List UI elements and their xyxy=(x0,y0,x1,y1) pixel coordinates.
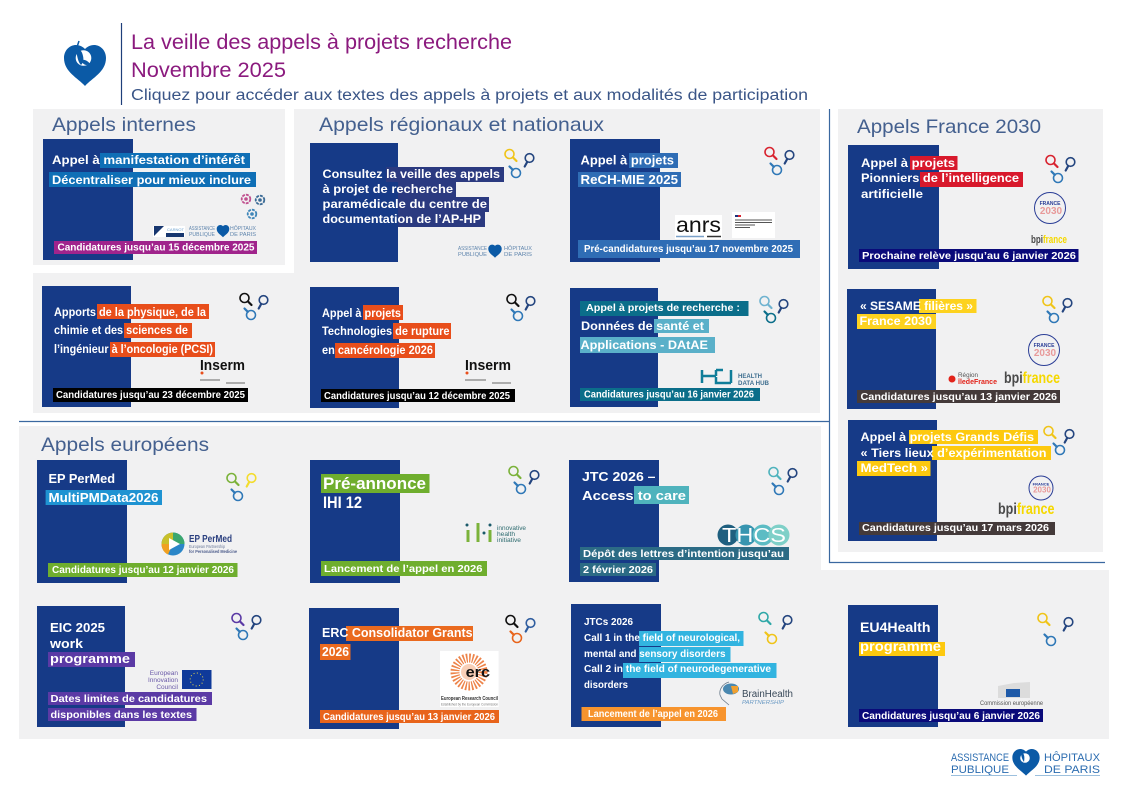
card: Pionniers de l'intelligence artificielle: Appel à projets xyxy=(861,156,955,170)
deadline: Candidatures jusqu’au 6 janvier 2026 xyxy=(862,710,1040,722)
icon: three virus shapes xyxy=(242,195,264,218)
card: DAtAE: Données de santé et xyxy=(581,319,704,333)
logo: erc xyxy=(440,651,499,707)
deadline: Candidatures jusqu’au 23 décembre 2025 xyxy=(56,390,245,401)
logo: Région Île-de-France xyxy=(948,373,997,386)
card: Technologies de rupture: Appel à projets xyxy=(322,308,401,320)
card: Décentraliser pour mieux inclure: Décentraliser pour mieux inclure xyxy=(52,175,251,187)
card: EU4Health programme xyxy=(848,605,1073,727)
logo: Région Île-de-France: Région xyxy=(958,373,978,379)
card: Décentraliser pour mieux inclure xyxy=(43,139,264,260)
heading: Appels France 2030: Appels France 2030 xyxy=(857,116,1041,138)
card: Pionniers de l'intelligence artificielle xyxy=(848,145,1078,269)
card: DAtAE xyxy=(570,288,788,407)
icon: magnifying glasses xyxy=(509,466,539,494)
logo: BrainHealth Partnership: PARTNERSHIP xyxy=(742,700,784,706)
logo: European Innovation Council: European xyxy=(150,670,178,677)
logo: ministère xyxy=(732,212,775,238)
header logo: AP-HP heart xyxy=(64,41,106,86)
deadline: Lancement de l’appel en 2026 xyxy=(588,709,718,720)
panel: Appels France 2030 xyxy=(838,109,1103,552)
card: EP PerMed: EP PerMed xyxy=(48,472,115,486)
card: Décentraliser pour mieux inclure: Appel à manifestation d’intérêt xyxy=(52,155,245,167)
card: Tiers lieux MedTech xyxy=(848,420,1074,541)
logo: France 2030: 2030 xyxy=(1040,206,1063,217)
card: IHI 12: IHI 12 xyxy=(323,494,362,512)
heading: Appels européens: Appels européens xyxy=(41,434,209,456)
card: Technologies de rupture: Technologies de rupture xyxy=(322,326,450,338)
card: JTCs 2026 Brain Health: Call 1 in the field of neurological, xyxy=(584,632,740,644)
logo: Commission européenne: Commission européenne xyxy=(980,700,1043,707)
logo: AP-HP: PUBLIQUE xyxy=(189,232,216,238)
card: Tiers lieux MedTech: « Tiers lieux d’expérimentation xyxy=(860,446,1046,460)
logo: Health Data Hub xyxy=(702,370,769,387)
card: veille recherche paramédicale: paramédicale du centre de xyxy=(322,199,487,211)
card: DAtAE: Appel à projets de recherche : xyxy=(586,302,740,314)
logo: Région Île-de-France: îledeFrance xyxy=(957,379,997,386)
card: EU4Health programme: EU4Health xyxy=(860,620,930,635)
deadline: Candidatures jusqu’au 12 décembre 2025 xyxy=(324,391,510,402)
card: Apports PCSI: l’ingénieur à l’oncologie (PCSI) xyxy=(54,344,213,356)
logo: EP PerMed: EP PerMed xyxy=(189,534,232,545)
card: Technologies de rupture xyxy=(310,287,535,408)
card: JTC 2026 Access to care xyxy=(569,460,797,582)
logo: Institut Carnot xyxy=(153,226,185,237)
panel: Appels internes xyxy=(33,109,285,265)
deadline: Pré-candidatures jusqu’au 17 novembre 2025 xyxy=(584,243,793,255)
logo: Health Data Hub: DATA HUB xyxy=(738,380,769,387)
icon: magnifying glasses xyxy=(769,468,797,494)
deadline: Candidatures jusqu’au 15 décembre 2025 xyxy=(58,242,255,254)
footer logo: Assistance Publique Hôpitaux de Paris: DE PARIS xyxy=(1044,764,1100,776)
card: veille recherche paramédicale xyxy=(310,143,534,262)
heading: Appels internes: Appels internes xyxy=(52,114,196,136)
logo: EP PerMed: European Partnership xyxy=(189,544,225,549)
deadline: Candidatures jusqu’au 13 janvier 2026 xyxy=(323,711,495,723)
deadline: Lancement de l’appel en 2026 xyxy=(324,563,483,575)
logo: EP PerMed: for Personalised Medicine xyxy=(189,549,237,554)
card: SESAME filières: « SESAME filières » xyxy=(860,299,973,313)
deadline: Prochaine relève jusqu’au 6 janvier 2026 xyxy=(862,250,1076,262)
card: Tiers lieux MedTech: Appel à projets Grands Défis xyxy=(860,430,1034,444)
footer logo: Assistance Publique Hôpitaux de Paris: PUBLIQUE xyxy=(951,764,1009,776)
deadline: Candidatures jusqu’au 17 mars 2026 xyxy=(862,522,1049,534)
logo: European Innovation Council xyxy=(148,670,212,691)
card: ReCH-MIE 2025: ReCH-MIE 2025 xyxy=(580,173,678,187)
icon: magnifying glasses xyxy=(240,294,268,320)
logo: France 2030: FRANCE xyxy=(1040,201,1061,207)
card: ERC Consolidator Grants: ERC Consolidator Grants xyxy=(322,626,473,640)
logo: THCS: THCS xyxy=(722,525,786,547)
logo: bpifrance: bpifrance xyxy=(1004,370,1060,387)
logo: France 2030: 2030 xyxy=(1033,486,1051,494)
deadline: Candidatures jusqu’au 12 janvier 2026 xyxy=(52,564,234,576)
logo: AP-HP: ASSISTANCE xyxy=(189,226,216,232)
logo: Inserm xyxy=(200,357,245,383)
footer logo: Assistance Publique Hôpitaux de Paris: ASSISTANCE xyxy=(951,752,1009,764)
logo: AP-HP: HÔPITAUX xyxy=(504,245,532,252)
card: Apports PCSI: Apports de la physique, de la xyxy=(54,307,207,319)
logo: anrs: anrs xyxy=(676,214,721,237)
card: EIC 2025 work programme: work xyxy=(49,636,84,651)
footer logo: Assistance Publique Hôpitaux de Paris xyxy=(951,749,1101,776)
logo: BrainHealth Partnership xyxy=(720,682,793,706)
icon: magnifying glasses xyxy=(760,296,788,322)
card: JTCs 2026 Brain Health xyxy=(571,604,793,727)
deadline: Dates limites de candidatures xyxy=(50,693,207,705)
logo: AP-HP: ASSISTANCE xyxy=(458,246,487,252)
card: IHI 12 xyxy=(310,460,539,583)
logo: erc: Established by the European Commission xyxy=(441,702,498,706)
deadline xyxy=(48,692,212,721)
card: EP PerMed xyxy=(37,460,256,583)
heading: Appels régionaux et nationaux: Appels régionaux et nationaux xyxy=(319,114,604,136)
card: JTCs 2026 Brain Health: disorders xyxy=(584,679,628,691)
card: SESAME filières xyxy=(847,289,1072,409)
card: EIC 2025 work programme: programme xyxy=(50,651,130,666)
logo: Institut Carnot: CARNOT xyxy=(167,227,185,232)
logo: innovative health initiative xyxy=(466,523,526,544)
icon: magnifying glasses xyxy=(1043,296,1072,322)
card: ERC Consolidator Grants: 2026 xyxy=(322,645,349,659)
logo: France 2030: 2030 xyxy=(1034,348,1057,359)
logo: Inserm: Inserm xyxy=(465,357,511,374)
logo: erc: erc xyxy=(466,664,490,681)
card: Apports PCSI xyxy=(42,286,268,407)
logo: BrainHealth Partnership: BrainHealth xyxy=(742,689,793,700)
icon: magnifying glasses xyxy=(1046,156,1075,182)
deadline: disponibles dans les textes xyxy=(50,709,192,721)
card: JTCs 2026 Brain Health: mental and sensory disorders xyxy=(584,648,726,660)
card: Technologies de rupture: en cancérologie 2026 xyxy=(322,345,433,357)
logo: innovative health initiative: initiative xyxy=(497,537,521,544)
logo: Commission européenne xyxy=(980,682,1043,707)
logo: AP-HP: PUBLIQUE xyxy=(458,252,487,258)
icon: magnifying glasses xyxy=(227,474,256,500)
card: EIC 2025 work programme: EIC 2025 xyxy=(50,620,105,635)
card: ReCH-MIE 2025 xyxy=(570,139,800,262)
card: veille recherche paramédicale: documentation de l’AP-HP xyxy=(322,214,481,226)
card: JTCs 2026 Brain Health: JTCs 2026 xyxy=(584,616,633,628)
icon: magnifying glasses xyxy=(232,614,261,640)
icon: magnifying glasses xyxy=(1044,426,1074,454)
logo: erc: European Research Council xyxy=(441,696,498,702)
logo: AP-HP: DE PARIS xyxy=(230,232,257,238)
logo: innovative health initiative: innovative xyxy=(497,525,526,532)
logo: France 2030: FRANCE xyxy=(1033,482,1050,486)
deadline: Candidatures jusqu’au 13 janvier 2026 xyxy=(860,391,1057,403)
card: Pionniers de l'intelligence artificielle: artificielle xyxy=(861,187,923,201)
logo: AP-HP xyxy=(458,245,532,258)
card: JTCs 2026 Brain Health: Call 2 in the field of neurodegenerative xyxy=(584,663,771,675)
logo: innovative health initiative: health xyxy=(497,531,515,538)
logo: bpifrance: bpifrance xyxy=(998,501,1055,518)
icon: magnifying glasses xyxy=(765,148,794,174)
card: EIC 2025 work programme xyxy=(37,606,261,727)
card: JTC 2026 Access to care: Access to care xyxy=(582,488,686,503)
logo: France 2030 xyxy=(1034,192,1066,224)
icon: magnifying glasses xyxy=(1038,614,1073,646)
card: ReCH-MIE 2025: Appel à projets xyxy=(580,154,674,168)
subtitle: date: Novembre 2025 xyxy=(131,59,286,82)
deadline: Candidatures jusqu’au 16 janvier 2026 xyxy=(584,390,754,400)
panel: Appels régionaux et nationaux xyxy=(33,109,820,413)
footer logo: Assistance Publique Hôpitaux de Paris: HÔPITAUX xyxy=(1044,751,1101,764)
logo: Inserm xyxy=(465,357,511,383)
instruction line: Cliquez pour accéder aux textes des appels à projets et aux modalités de participation xyxy=(131,87,808,104)
logo: bpifrance: bpifrance xyxy=(1031,234,1067,246)
card: veille recherche paramédicale: à projet de recherche xyxy=(322,184,453,196)
icon: magnifying glasses xyxy=(759,612,792,644)
logo: AP-HP: HÔPITAUX xyxy=(230,225,257,232)
card: veille recherche paramédicale: Consultez la veille des appels xyxy=(322,169,500,181)
deadline: Dépôt des lettres d’intention jusqu’au xyxy=(583,548,784,560)
card: EU4Health programme: programme xyxy=(860,639,942,654)
card: Pionniers de l'intelligence artificielle: Pionniers de l’intelligence xyxy=(861,171,1019,185)
card: ERC Consolidator Grants xyxy=(309,608,535,729)
logo: AP-HP: DE PARIS xyxy=(504,252,532,258)
logo: France 2030 xyxy=(1029,476,1053,500)
logo: Inserm: Inserm xyxy=(200,357,245,374)
deadline xyxy=(578,240,800,258)
icon: magnifying glasses xyxy=(506,616,535,642)
card: JTC 2026 Access to care: JTC 2026 – xyxy=(582,469,656,484)
card: EP PerMed: MultiPMData2026 xyxy=(48,491,159,505)
card: SESAME filières: France 2030 xyxy=(860,314,932,328)
logo: France 2030 xyxy=(1028,334,1060,366)
logo: European Innovation Council: Innovation xyxy=(148,677,178,684)
card: IHI 12: Pré-annonce xyxy=(323,475,426,493)
header divider xyxy=(120,23,122,105)
logo: France 2030: FRANCE xyxy=(1034,343,1055,349)
icon: magnifying glasses xyxy=(505,150,534,178)
card: DAtAE: Applications - DAtAE xyxy=(580,338,708,352)
logo: EP PerMed xyxy=(161,532,237,556)
card: Apports PCSI: chimie et des sciences de xyxy=(54,325,188,337)
deadline: 2 février 2026 xyxy=(583,564,653,576)
title: La veille des appels à projets recherche xyxy=(131,31,512,54)
card: Tiers lieux MedTech: MedTech » xyxy=(860,461,928,475)
deadline xyxy=(580,547,789,576)
panel: Appels européens xyxy=(19,426,1109,739)
logo: AP-HP xyxy=(189,225,257,238)
logo: Health Data Hub: HEALTH xyxy=(738,373,762,380)
logo: European Innovation Council: Council xyxy=(156,684,179,691)
icon: magnifying glasses xyxy=(507,294,535,320)
